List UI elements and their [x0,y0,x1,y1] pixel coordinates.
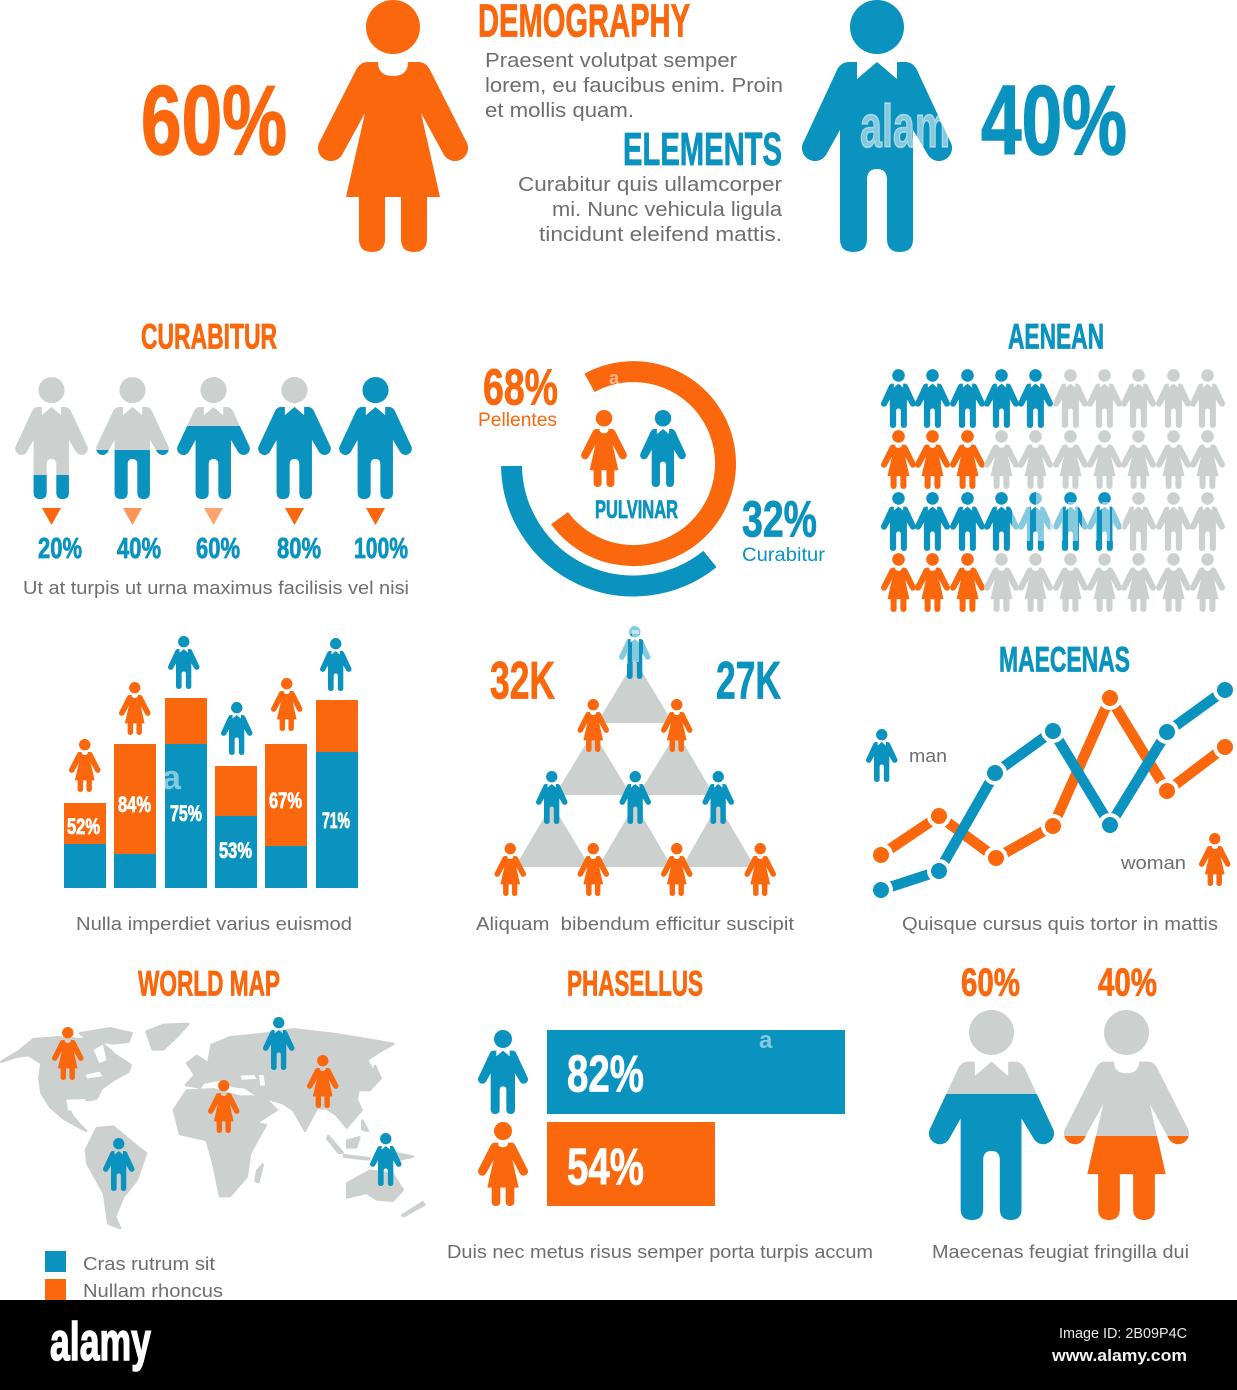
legend: orange [45,1279,223,1301]
arc: orange [560,372,726,556]
figure: top man [618,626,651,679]
labels: percent values: 100% [354,533,408,565]
heading: maecenas: MAECENAS [999,640,1130,680]
caption: pyramid: Aliquam bibendum efficitur suscipit [476,913,794,934]
panel: phasellus bars [478,1027,845,1206]
figures: row 4 women [494,843,776,896]
caption: curabitur: Ut at turpis ut urna maximus facilisis vel nisi [23,577,409,598]
figure: woman [581,410,627,487]
figure: woman [1064,1010,1189,1220]
title: elements: ELEMENTS [623,123,782,175]
watermark fragment: a [162,759,182,797]
text block: praesent: Praesent volutpat semper [485,49,737,72]
panel: stacked bar chart [64,636,358,888]
website: www.alamy.com [1051,1346,1187,1365]
stat: 60 percent: 60% [141,65,287,175]
figure: man [640,410,686,487]
bar labels: 52% [67,814,100,839]
text block: praesent: et mollis quam. [485,99,634,122]
bar 3 [165,698,207,888]
stat: 40 percent: 40% [981,65,1127,175]
watermark fragment: a [609,368,620,388]
figure: 80 percent [258,377,331,499]
figures: row 2 women [577,699,693,752]
bar 4 [215,766,257,888]
legend label: man: man [909,745,947,766]
figures: row 3 men [536,771,734,824]
markers: triangles [42,508,385,525]
bar 2 [114,744,156,888]
figure: 60 percent [177,377,250,499]
text block: praesent: lorem, eu faucibus enim. Proin [485,74,783,97]
bar labels: 67% [269,788,302,813]
panel: curabitur progress figures [15,377,412,565]
bar labels: 53% [219,838,252,863]
bar: 82 percent [547,1027,845,1114]
text block: curabitur: Curabitur quis ullamcorper [518,173,782,196]
bar: 82 percent: 82% [567,1046,644,1104]
bar: 54 percent: 54% [567,1138,644,1196]
labels: percent values: 20% [38,533,82,565]
stat: 40 percent: 40% [1098,962,1157,1004]
legend figure: man [866,729,898,782]
text block: curabitur: mi. Nunc vehicula ligula [552,198,783,221]
figure: woman [478,1122,528,1206]
text block: praesent [485,49,783,122]
label: curabitur: Curabitur [742,545,826,566]
panel: pyramid [490,626,781,896]
labels: percent values: 80% [277,533,321,565]
labels: percent values: 60% [196,533,240,565]
legend label: woman: woman [1120,852,1186,873]
bar labels [67,788,350,863]
heading: phasellus: PHASELLUS [567,964,703,1004]
figure: man 40%: alam [860,93,950,160]
footer logo: alamy [50,1312,151,1372]
bar: 82 percent: a [759,1027,773,1054]
bar labels: 71% [322,808,350,833]
heading: aenean: AENEAN [1008,318,1104,356]
figure: man [929,1010,1054,1220]
text block: curabitur [518,173,783,246]
labels: percent values: 40% [117,533,161,565]
row 4: women [881,553,1225,612]
map: continents [1,1024,424,1228]
triangles [515,660,755,867]
panel: line chart [866,680,1235,900]
caption: phasellus: Duis nec metus risus semper porta turpis accum [447,1241,873,1262]
footer band [0,1300,1237,1390]
stat: 32K: 32K [490,652,555,710]
legend: blue [45,1251,215,1274]
row 2: women [881,430,1225,489]
heading: world map: WORLD MAP [138,964,280,1004]
stat: 32 percent: 32% [742,490,817,548]
panel: aenean people grid [881,369,1225,612]
row 1: men [881,369,1225,428]
figure: 40 percent [96,377,169,499]
bar 5 [265,744,307,888]
label: pulvinar: PULVINAR [595,496,678,524]
legend: blue: Cras rutrum sit [83,1253,215,1274]
legend figure: woman [1199,833,1231,886]
map figures [52,1017,402,1191]
panel: gender split [929,962,1189,1220]
bar labels: 84% [118,792,151,817]
label: pellentes: Pellentes [478,410,557,431]
arc: blue [512,466,710,586]
bar 1 [64,803,106,888]
caption: line chart: Quisque cursus quis tortor in mattis [902,913,1218,934]
text block: curabitur: tincidunt eleifend mattis. [539,223,782,246]
caption: bars: Nulla imperdiet varius euismod [76,913,352,934]
stat: 27K: 27K [716,652,781,710]
heading: curabitur: CURABITUR [141,318,277,356]
figure: man [478,1030,528,1114]
figure: 20 percent [15,377,88,499]
row 3: men [881,492,1225,551]
bar 6 [316,700,358,888]
bar figures [69,636,352,792]
image id: Image ID: 2B09P4C [1059,1325,1187,1342]
stat: 68 percent: 68% [483,358,558,416]
bar labels: 75% [170,801,202,826]
figure: 100 percent [339,377,412,499]
legend: orange: Nullam rhoncus [83,1280,223,1301]
line: man series [871,680,1235,900]
figure: woman 60% [318,0,468,252]
bar: 54 percent [547,1122,715,1206]
stat: 60 percent: 60% [961,962,1020,1004]
line: woman series [871,688,1235,868]
caption: gender split: Maecenas feugiat fringilla dui [932,1241,1189,1262]
panel: donut chart [478,358,826,586]
panel: world map [1,1017,424,1228]
labels: percent values [38,533,408,565]
figure: man 40% [802,0,952,252]
